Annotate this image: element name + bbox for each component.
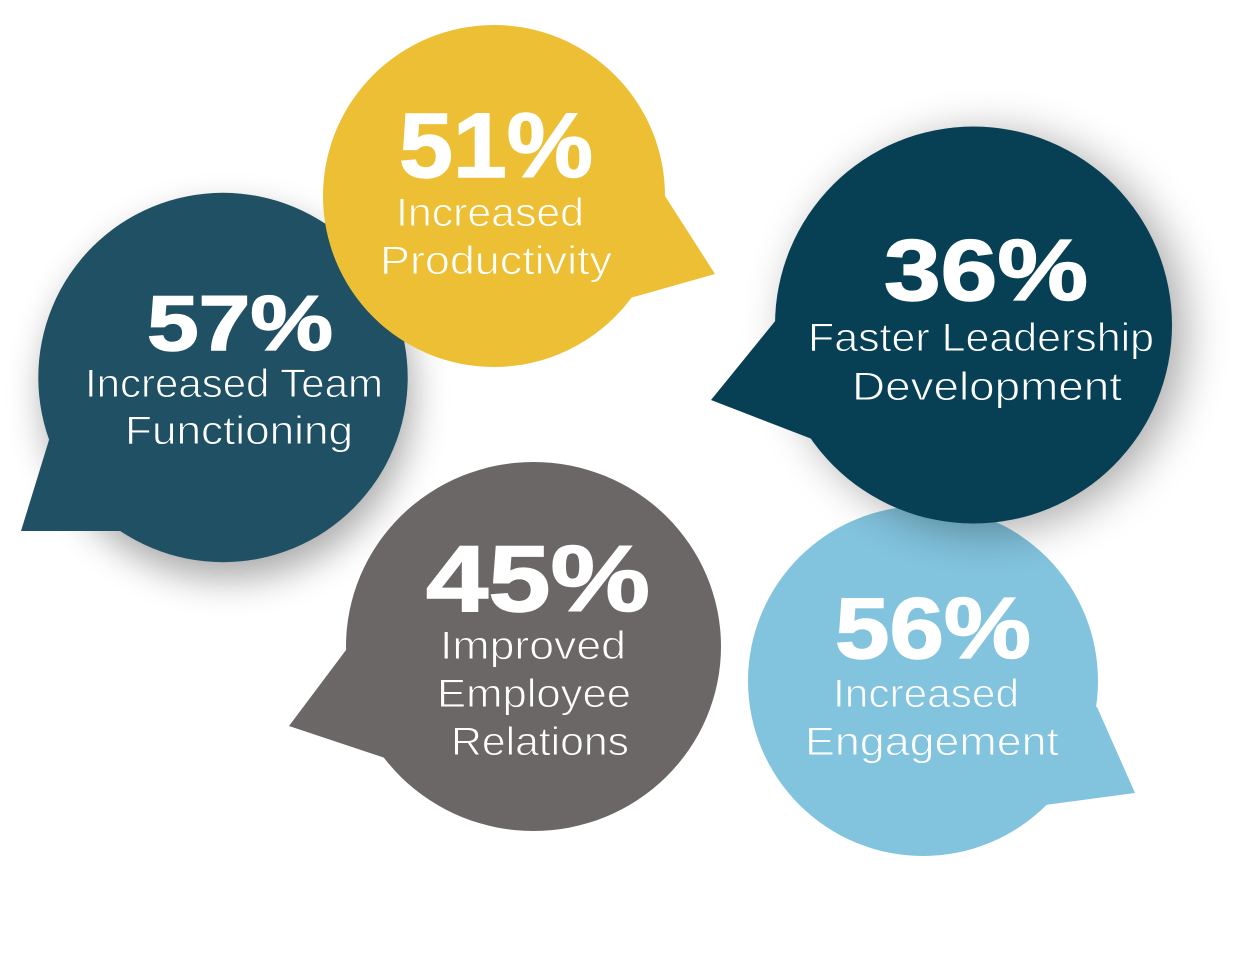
- label: increased engagement: Increased: [833, 672, 1019, 716]
- bubble: 57% increased team functioning: [21, 193, 408, 562]
- label: increased team functioning: [85, 362, 383, 453]
- bubble: 36% faster leadership development: [711, 126, 1172, 524]
- drop shadow: team functioning bubble: [43, 210, 413, 579]
- stat: 36%: 36%: [884, 223, 1088, 319]
- label: improved employee relations: [437, 624, 631, 764]
- bubble: 56% increased engagement: [748, 506, 1135, 856]
- label: increased productivity: [380, 191, 612, 283]
- label: increased engagement: [805, 672, 1059, 764]
- label: faster leadership development: [808, 316, 1154, 409]
- label: faster leadership development: Faster Leadership: [808, 316, 1154, 360]
- stat: 57%: 57%: [147, 279, 333, 367]
- bubble: 51% increased productivity: [323, 25, 715, 367]
- label: improved employee relations: Employee: [437, 672, 631, 716]
- stat: 45%: 45%: [426, 526, 650, 631]
- label: improved employee relations: Improved: [440, 624, 626, 668]
- label: improved employee relations: Relations: [451, 720, 629, 764]
- label: increased team functioning: Functioning: [125, 409, 353, 453]
- label: faster leadership development: Development: [852, 365, 1122, 409]
- bubble: 45% improved employee relations: [289, 462, 721, 831]
- label: increased productivity: Productivity: [380, 239, 612, 283]
- stat: 51%: 51%: [399, 95, 593, 197]
- label: increased team functioning: Increased Team: [85, 362, 383, 406]
- stat: 56%: 56%: [835, 581, 1031, 677]
- label: increased engagement: Engagement: [805, 720, 1059, 764]
- drop shadow: leadership bubble: [788, 134, 1185, 530]
- label: increased productivity: Increased: [396, 191, 584, 235]
